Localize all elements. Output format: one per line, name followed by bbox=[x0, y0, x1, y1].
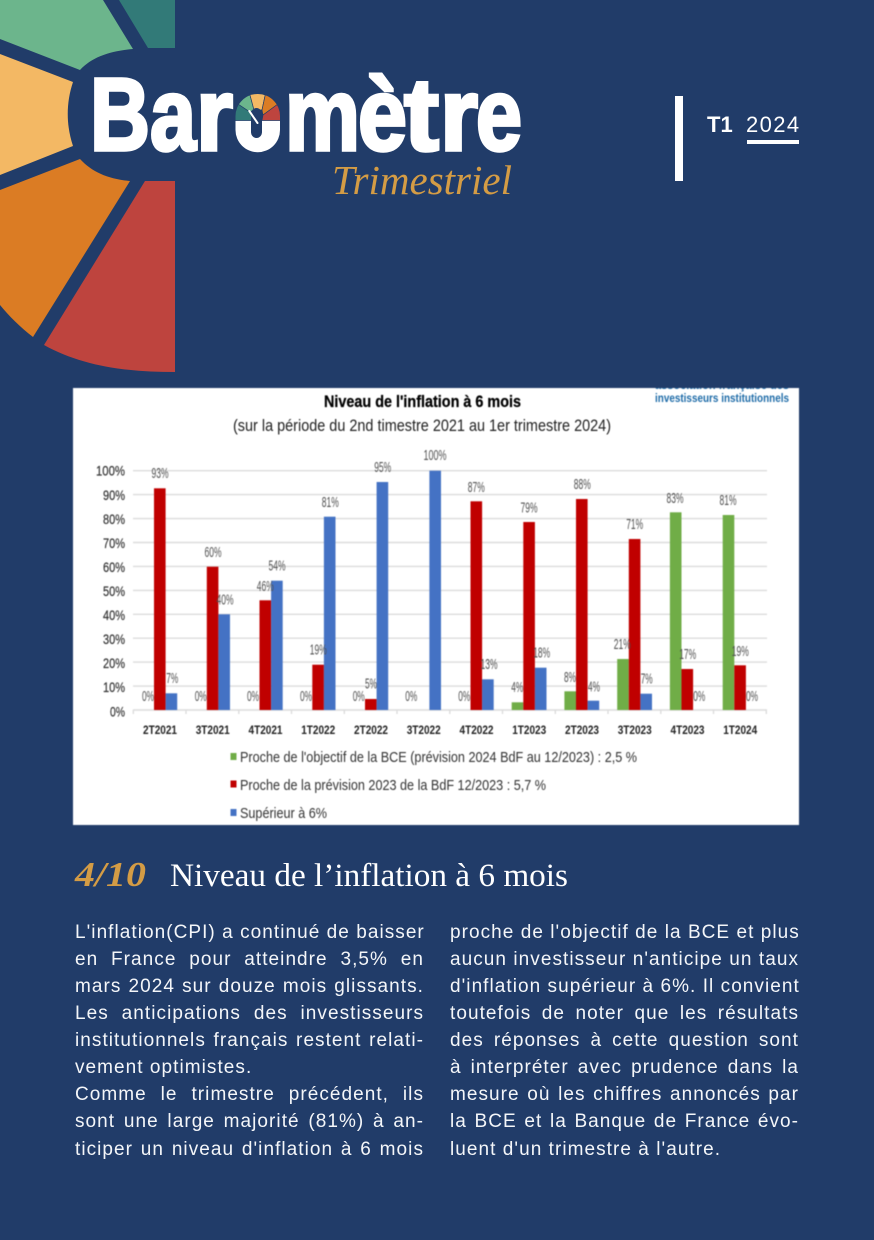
wordmark: Bar bbox=[90, 57, 233, 172]
y axis labels: 90% bbox=[103, 487, 125, 503]
x axis labels: 4T2023 bbox=[670, 723, 705, 737]
data labels bbox=[142, 448, 758, 705]
text column: right: la BCE et la Banque de France évo- bbox=[450, 1111, 799, 1132]
x axis labels: 1T2023 bbox=[512, 723, 546, 737]
legend: Proche de la prévision 2023 de la BdF 12/2023 : 5,7 % bbox=[240, 777, 546, 794]
legend bbox=[230, 749, 637, 822]
y axis labels: 40% bbox=[103, 607, 125, 623]
data labels: 54% bbox=[268, 558, 286, 574]
y axis labels: 80% bbox=[103, 511, 125, 527]
data labels: 71% bbox=[626, 517, 643, 533]
bars: supérieur à 6% bbox=[166, 471, 652, 710]
chart subtitle: (sur la période du 2nd timestre 2021 au 1er trimestre 2024) bbox=[233, 417, 611, 435]
y axis labels: 20% bbox=[103, 655, 125, 671]
x axis labels: 3T2022 bbox=[407, 723, 441, 737]
grid lines bbox=[133, 471, 767, 714]
data labels: 13% bbox=[480, 657, 498, 673]
x axis labels: 2T2021 bbox=[143, 723, 177, 737]
x axis labels: 4T2022 bbox=[460, 723, 494, 737]
data labels: 46% bbox=[257, 579, 274, 595]
bars: proche de l'objectif de la BCE bbox=[512, 512, 734, 710]
text column: right bbox=[450, 922, 800, 1160]
data labels: 4% bbox=[588, 680, 600, 696]
data labels: 40% bbox=[216, 592, 234, 608]
text column: right: d'inflation supérieur à 6%. Il convient bbox=[450, 976, 800, 997]
data labels: 81% bbox=[322, 495, 339, 511]
data labels: 19% bbox=[310, 642, 327, 658]
data labels: 83% bbox=[666, 491, 684, 507]
x axis labels: 3T2023 bbox=[618, 723, 652, 737]
period label: T1 2024 bbox=[707, 112, 801, 144]
data labels: 21% bbox=[614, 637, 631, 653]
data labels: 79% bbox=[520, 500, 538, 516]
text column: right: des réponses à cette question sont bbox=[450, 1030, 799, 1051]
y axis labels: 10% bbox=[103, 679, 125, 695]
y axis labels: 70% bbox=[103, 535, 125, 551]
wheel segment: yellow bbox=[0, 54, 73, 175]
data labels: 0% bbox=[195, 689, 207, 705]
wordmark: mètre: m bbox=[285, 57, 360, 172]
bars: proche de la prévision 2023 bbox=[154, 488, 746, 710]
wordmark: mètre: è bbox=[358, 57, 407, 172]
wordmark: mètre: t bbox=[404, 57, 439, 172]
data labels: 17% bbox=[679, 647, 696, 663]
data labels: 0% bbox=[693, 689, 705, 705]
divider bar beside the period label bbox=[675, 96, 683, 181]
chart title: Niveau de l'inflation à 6 mois bbox=[324, 393, 521, 411]
wordmark: Bar: r bbox=[196, 57, 233, 172]
wordmark: Bar: B bbox=[90, 57, 150, 172]
icon: gauge as the letter o bbox=[236, 94, 280, 152]
data labels: 0% bbox=[142, 689, 154, 705]
data labels: 7% bbox=[166, 671, 178, 687]
data labels: 4% bbox=[511, 680, 523, 696]
text column: left: institutionnels français restent relati- bbox=[75, 1030, 424, 1051]
y axis labels: 100% bbox=[96, 462, 125, 478]
wheel segment: orange bbox=[0, 159, 130, 337]
data labels: 0% bbox=[746, 689, 758, 705]
data labels: 0% bbox=[353, 689, 365, 705]
wordmark: mètre: r bbox=[440, 57, 478, 172]
data labels: 0% bbox=[405, 689, 417, 705]
section title: Niveau de l’inflation à 6 mois bbox=[170, 858, 568, 894]
text column: right: luent d'un trimestre à l'autre. bbox=[450, 1139, 721, 1160]
text column: left bbox=[75, 922, 425, 1160]
data labels: 60% bbox=[204, 545, 222, 561]
text column: right: toutefois de noter que les résultats bbox=[450, 1003, 799, 1024]
text column: left: ticiper un niveau d'inflation à 6 mois bbox=[75, 1139, 424, 1160]
chart panel: niveau de l'inflation bbox=[73, 388, 799, 825]
text column: left: Les anticipations des investisseurs bbox=[75, 1003, 424, 1024]
logo: Baromètre Trimestriel bbox=[90, 57, 522, 203]
data labels: 0% bbox=[247, 689, 259, 705]
decorative colour wheel bbox=[0, 0, 175, 372]
text column: left: en France pour atteindre 3,5% en bbox=[75, 949, 424, 970]
data labels: 18% bbox=[533, 646, 550, 662]
data labels: 5% bbox=[365, 676, 377, 692]
section heading bbox=[74, 855, 568, 894]
data labels: 81% bbox=[720, 493, 737, 509]
data labels: 7% bbox=[641, 672, 653, 688]
section number: 4/10 bbox=[74, 855, 146, 894]
wheel segment: green bbox=[0, 0, 133, 70]
y axis labels: 30% bbox=[103, 631, 125, 647]
legend: Proche de l'objectif de la BCE (prévision 2024 BdF au 12/2023) : 2,5 % bbox=[240, 749, 637, 766]
text column: right: proche de l'objectif de la BCE et plus bbox=[450, 922, 800, 942]
source logo text bbox=[655, 380, 789, 405]
wheel segment: red bbox=[44, 181, 175, 372]
data labels: 95% bbox=[374, 460, 391, 476]
text column: left: vement optimistes. bbox=[75, 1057, 252, 1078]
data labels: 8% bbox=[564, 670, 576, 686]
data labels: 93% bbox=[152, 466, 169, 482]
y axis labels bbox=[96, 462, 125, 720]
text column: right: mesure où les chiffres annoncés par bbox=[450, 1084, 799, 1105]
text column: left: L'inflation(CPI) a continué de baisser bbox=[75, 922, 425, 942]
wordmark: Bar: a bbox=[150, 57, 197, 172]
data labels: 0% bbox=[458, 689, 470, 705]
x axis labels: 1T2024 bbox=[723, 723, 757, 737]
x axis labels: 4T2021 bbox=[248, 723, 283, 737]
text column: left: mars 2024 sur douze mois glissants. bbox=[75, 976, 424, 997]
wheel segment: teal bbox=[119, 0, 175, 48]
wordmark: mètre: e bbox=[476, 57, 522, 172]
x axis labels: 2T2022 bbox=[354, 723, 388, 737]
data labels: 19% bbox=[732, 644, 749, 660]
x axis labels: 1T2022 bbox=[301, 723, 335, 737]
y axis labels: 60% bbox=[103, 559, 125, 575]
text column: right: à interpréter avec prudence dans la bbox=[450, 1057, 799, 1078]
y axis labels: 50% bbox=[103, 583, 125, 599]
period label: T1 2024: 2024 bbox=[746, 112, 801, 137]
x axis labels: 2T2023 bbox=[565, 723, 599, 737]
text column: left: Comme le trimestre précédent, ils bbox=[75, 1084, 424, 1105]
y axis labels: 0% bbox=[110, 704, 125, 720]
data labels: 87% bbox=[468, 480, 485, 496]
text column: right: aucun investisseur n'anticipe un taux bbox=[450, 949, 799, 970]
wordmark: mètre bbox=[285, 57, 522, 172]
x axis labels: 3T2021 bbox=[196, 723, 230, 737]
data labels: 0% bbox=[300, 689, 312, 705]
x axis labels bbox=[143, 723, 757, 737]
period label: T1 2024: T1 bbox=[707, 112, 733, 137]
legend: Supérieur à 6% bbox=[240, 805, 327, 822]
data labels: 88% bbox=[574, 477, 591, 493]
text column: left: sont une large majorité (81%) à an- bbox=[75, 1111, 424, 1132]
wordmark: Trimestriel: Trimestriel bbox=[332, 157, 512, 203]
data labels: 100% bbox=[424, 448, 447, 464]
